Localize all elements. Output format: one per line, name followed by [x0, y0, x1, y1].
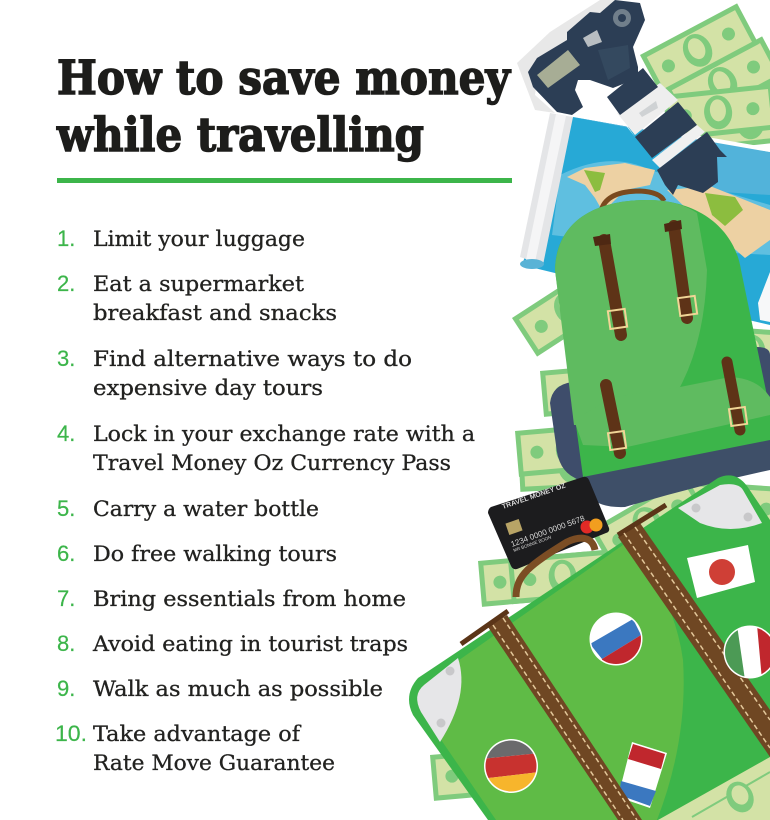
item 7: Bring essentials from home: [93, 587, 406, 611]
item 1: 1.: [57, 226, 75, 251]
sticker: Japan: [687, 545, 755, 598]
map roll: [520, 113, 770, 322]
item 2: Eat a supermarket: [93, 272, 305, 296]
travel money card: [488, 477, 609, 569]
backpack light panel: [555, 200, 707, 425]
top handle: [601, 191, 664, 211]
item 5: Carry a water bottle: [93, 497, 319, 521]
item 6: 6.: [57, 541, 75, 566]
backpack: [550, 191, 770, 507]
item 3: Find alternative ways to do: [93, 347, 412, 371]
item 3: [57, 346, 412, 400]
item 8: 8.: [57, 631, 75, 656]
camera: [517, 0, 727, 195]
title: [56, 51, 512, 163]
banknotes background: [430, 3, 770, 820]
buckles: [608, 296, 747, 450]
item 4: 4.: [57, 421, 75, 446]
camera dial: [613, 9, 631, 27]
item 2: [57, 271, 337, 325]
suitcase: [409, 475, 770, 820]
item 3: 3.: [57, 346, 75, 371]
leather straps: [461, 505, 770, 820]
lens: [585, 68, 727, 195]
numbered list: [55, 226, 475, 775]
item 7: 7.: [57, 586, 75, 611]
item 10: 10.: [55, 721, 87, 746]
sticker: Germany: [484, 739, 538, 793]
travel money card: TRAVEL MONEY OZ: [501, 482, 567, 511]
title: while travelling: [56, 108, 424, 163]
sticker: Russia: [590, 612, 642, 666]
camera screen: [537, 50, 580, 88]
item 9: Walk as much as possible: [93, 677, 383, 701]
travel money card: MR BONNIE BOON: [513, 535, 552, 553]
front pocket: [574, 377, 770, 447]
suitcase shell: [409, 475, 770, 820]
suitcase handle: [516, 538, 595, 597]
item 8: Avoid eating in tourist traps: [92, 632, 408, 656]
sticker: Netherlands: [618, 742, 667, 808]
title: How to save money: [57, 51, 512, 106]
straps: [604, 226, 740, 453]
item 3: expensive day tours: [93, 376, 323, 400]
camera halo: [517, 0, 615, 113]
item 5: 5.: [57, 496, 75, 521]
world map: [522, 117, 770, 325]
item 6: Do free walking tours: [93, 542, 337, 566]
item 4: Travel Money Oz Currency Pass: [93, 451, 451, 475]
camera body: [528, 0, 645, 115]
suitcase light panel: [419, 540, 684, 820]
metal corners: [417, 484, 762, 742]
item 2: breakfast and snacks: [93, 301, 337, 325]
item 9: 9.: [57, 676, 75, 701]
item 10: Rate Move Guarantee: [93, 751, 335, 775]
sticker: Italy: [724, 626, 770, 678]
backpack base: [581, 430, 770, 507]
travel money card: 1234 0000 0000 5678: [510, 514, 586, 549]
item 4: [57, 421, 475, 475]
item 4: Lock in your exchange rate with a: [93, 422, 475, 446]
backpack body: [555, 200, 770, 477]
item 10: [55, 721, 335, 775]
item 2: 2.: [57, 271, 75, 296]
item 10: Take advantage of: [93, 722, 302, 746]
backpack side pockets: [550, 347, 770, 500]
item 1: Limit your luggage: [93, 227, 305, 251]
